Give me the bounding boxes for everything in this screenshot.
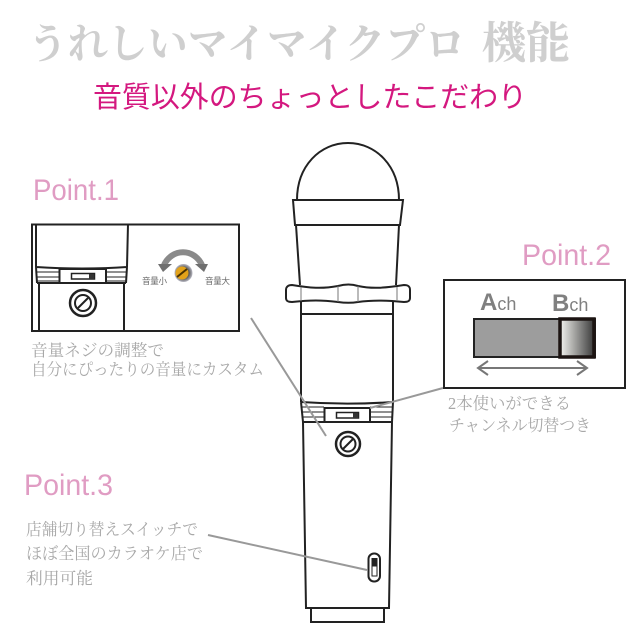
label: volume low: 音量小 — [142, 276, 167, 286]
label: B channel: Bch — [552, 290, 588, 317]
volume direction arrow — [158, 252, 208, 272]
title: function label: 機能 — [482, 19, 570, 68]
heading: point 1: Point.1 — [33, 174, 119, 207]
caption: point 2 — [448, 394, 591, 435]
close-up of microphone body — [36, 224, 128, 331]
caption: point 1: 音量ネジの調整で — [31, 341, 164, 360]
volume screw icon — [174, 264, 192, 282]
caption: point 1 — [31, 341, 264, 379]
switch knob — [560, 319, 594, 357]
leader line: point 1 — [251, 318, 326, 436]
leader line: point 3 — [208, 535, 367, 570]
microphone dome — [297, 143, 399, 200]
microphone switch band — [301, 402, 393, 422]
microphone upper body — [296, 225, 399, 285]
title: うれしいマイマイクプロ — [28, 21, 465, 67]
caption: point 3: 利用可能 — [26, 569, 93, 588]
microphone lower body — [303, 422, 392, 608]
microphone middle body — [301, 302, 393, 402]
microphone ring — [286, 284, 410, 303]
label: A channel: Ach — [480, 289, 516, 316]
switch track — [474, 319, 595, 357]
caption: point 3 — [26, 520, 203, 588]
microphone collar — [293, 200, 403, 225]
heading: point 3: Point.3 — [24, 469, 113, 502]
leader line: point 2 — [370, 388, 443, 408]
subtitle: 音質以外のちょっとしたこだわり — [93, 81, 527, 114]
microphone foot — [311, 608, 384, 622]
caption: point 2: 2本使いができる — [448, 394, 571, 413]
microphone store switch — [368, 554, 380, 582]
microphone volume screw — [336, 432, 360, 456]
caption: point 1: 自分にぴったりの音量にカスタム — [31, 360, 264, 379]
panel: channel switch — [444, 280, 625, 388]
heading: point 2: Point.2 — [522, 239, 611, 272]
caption: point 3: ほぼ全国のカラオケ店で — [26, 544, 203, 563]
two-way arrow — [478, 361, 587, 375]
caption: point 2: チャンネル切替つき — [449, 416, 591, 435]
label: volume high: 音量大 — [205, 276, 230, 286]
microphone illustration — [286, 143, 410, 622]
caption: point 3: 店舗切り替えスイッチで — [26, 520, 198, 539]
panel: volume detail — [32, 224, 239, 331]
